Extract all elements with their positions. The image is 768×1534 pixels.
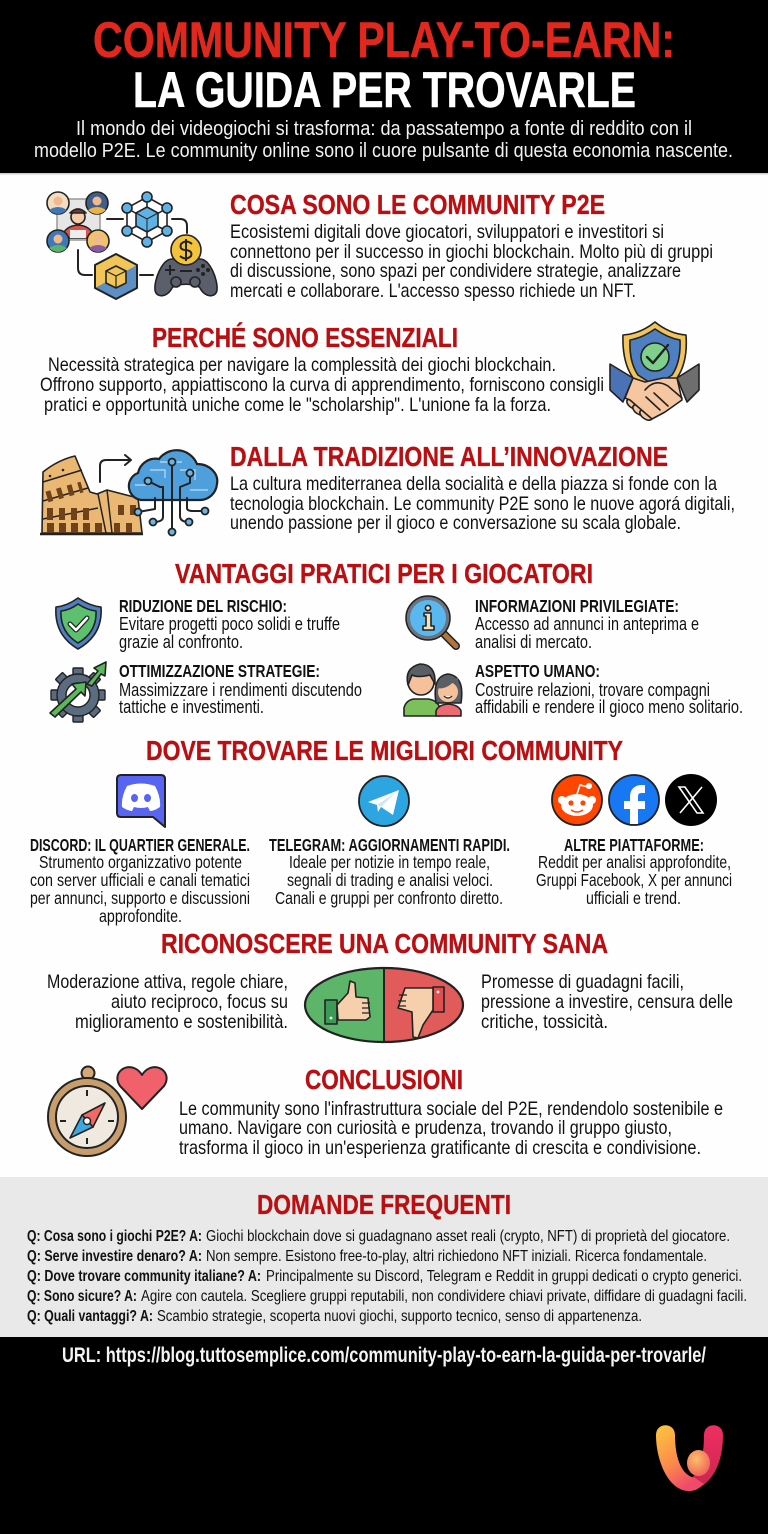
discord text [30,835,250,926]
faq 5: Scambio strategie, scoperta nuovi giochi, supporto tecnico, senso di appartenenza. [157,1308,642,1325]
heading: PERCHÉ SONO ESSENZIALI [152,322,458,353]
benefit: informazioni privilegiate: INFORMAZIONI PRIVILEGIATE: [475,596,679,616]
heading: DALLA TRADIZIONE ALL’INNOVAZIONE [230,441,668,472]
faq 3 [27,1268,742,1285]
faq 1: Q: Cosa sono i giochi P2E? A: [27,1228,202,1245]
discord text: con server ufficiali e canali tematici [30,870,250,890]
icon: x [665,774,717,826]
icon: thumbs up and down [305,968,463,1042]
altre piattaforme text [536,835,732,908]
icon: telegram [359,776,409,826]
paragraph: Offrono supporto, appiattiscono la curva di apprendimento, forniscono consigli [40,374,604,396]
benefit: ottimizzazione strategie: OTTIMIZZAZIONE STRATEGIE: [119,661,320,681]
paragraph [179,1098,723,1159]
icon: discord [117,775,165,827]
benefit: ottimizzazione strategie: tattiche e investimenti. [119,697,264,717]
paragraph: umano. Navigare con curiosità e prudenza, trovando il gruppo giusto, [179,1117,672,1139]
faq 5: Q: Quali vantaggi? A: [27,1308,153,1325]
paragraph: unendo passione per il gioco e conversazione su scala globale. [230,512,681,534]
telegram text: TELEGRAM: AGGIORNAMENTI RAPIDI. [269,835,510,855]
paragraph: mercati e collaborare. L'accesso spesso richiede un NFT. [230,280,636,302]
benefit: riduzione del rischio: RIDUZIONE DEL RISCHIO: [119,596,287,616]
faq 5 [27,1308,642,1325]
intro text: Il mondo dei videogiochi si trasforma: da passatempo a fonte di reddito con il [76,117,692,140]
faq 3: Q: Dove trovare community italiane? A: [27,1268,261,1285]
healthy signs text: aiuto reciproco, focus su [111,991,288,1013]
healthy signs text [47,971,288,1033]
telegram text: Canali e gruppi per confronto diretto. [275,888,503,908]
heading: COSA SONO LE COMMUNITY P2E [230,189,605,220]
benefit: riduzione del rischio: Evitare progetti poco solidi e truffe [119,614,340,634]
heading: vantaggi: VANTAGGI PRATICI PER I GIOCATORI [175,558,593,589]
icon: compass and heart [48,1066,167,1156]
icon: shield and handshake [610,322,699,422]
icon: shield check [56,598,101,649]
paragraph: pratici e opportunità uniche come le "scholarship". L'unione fa la forza. [44,394,551,416]
icon: facebook [609,775,659,825]
benefit: riduzione del rischio [119,596,340,652]
paragraph: Ecosistemi digitali dove giocatori, sviluppatori e investitori si [230,221,664,243]
discord text: approfondite. [99,906,182,926]
section: cosa sono [230,189,713,302]
icon: community network [47,192,217,299]
icon: magnifier info [406,596,456,646]
section: conclusioni [179,1064,723,1159]
benefit: aspetto umano [475,661,743,717]
icon: two people [404,664,462,716]
paragraph [230,221,713,302]
heading: DOMANDE FREQUENTI [257,1189,511,1220]
benefit: informazioni privilegiate: Accesso ad annunci in anteprima e [475,614,699,634]
faq 2 [27,1248,707,1265]
telegram text: segnali di trading e analisi veloci. [287,870,493,890]
paragraph: Necessità strategica per navigare la complessità dei giochi blockchain. [48,354,556,376]
discord text: DISCORD: IL QUARTIER GENERALE. [30,835,250,855]
icon: gear with arrows [50,662,106,722]
benefit: aspetto umano: Costruire relazioni, trovare compagni [475,680,710,700]
benefit: aspetto umano: ASPETTO UMANO: [475,661,600,681]
healthy signs text: Moderazione attiva, regole chiare, [47,971,288,993]
benefit: ottimizzazione strategie [119,661,362,717]
paragraph [40,354,604,416]
logo [656,1425,723,1491]
intro text [34,117,733,162]
heading: CONCLUSIONI [305,1064,463,1095]
telegram text: Ideale per notizie in tempo reale, [289,852,490,872]
paragraph [230,473,735,534]
healthy signs text: miglioramento e sostenibilità. [75,1011,288,1033]
panel: faq [0,1177,768,1337]
warning signs text [481,971,733,1033]
benefit: ottimizzazione strategie: Massimizzare i rendimenti discutendo [119,680,362,700]
warning signs text: critiche, tossicità. [481,1011,608,1033]
icon: colosseum to cloud [40,450,217,536]
section: dalla tradizione [230,441,735,534]
benefit: riduzione del rischio: grazie al confronto. [119,632,243,652]
discord text: per annunci, supporto e discussioni [30,888,250,908]
paragraph: di discussione, sono spazi per condividere strategie, analizzare [230,260,681,282]
discord text: Strumento organizzativo potente [39,852,242,872]
altre piattaforme text: ufficiali e trend. [586,888,681,908]
benefit: informazioni privilegiate: analisi di mercato. [475,632,592,652]
altre piattaforme text: ALTRE PIATTAFORME: [564,835,704,855]
faq 4: Q: Sono sicure? A: [27,1288,137,1305]
faq 2: Q: Serve investire denaro? A: [27,1248,202,1265]
section: perché [40,322,604,416]
header panel [0,0,768,174]
warning signs text: Promesse di guadagni facili, [481,971,684,993]
benefit: informazioni privilegiate [475,596,699,652]
panel: footer [0,1337,768,1534]
title line 2: LA GUIDA PER TROVARLE [133,62,636,118]
telegram text [269,835,510,908]
heading: riconoscere: RICONOSCERE UNA COMMUNITY SANA [161,928,608,959]
heading: dove trovare: DOVE TROVARE LE MIGLIORI COMMUNITY [146,735,623,766]
icon: reddit [552,775,602,825]
